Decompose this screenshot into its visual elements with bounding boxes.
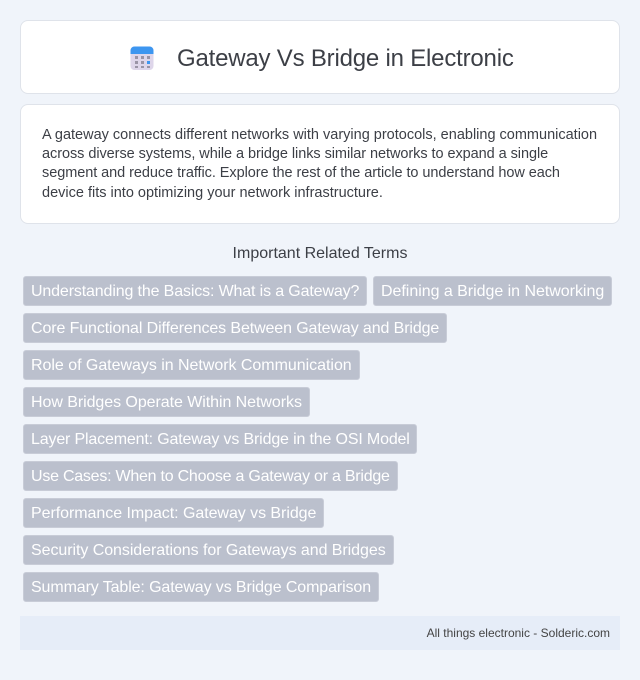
tag: Security Considerations for Gateways and Bridges: [31, 542, 386, 559]
tag: [23, 424, 417, 454]
tag: Understanding the Basics: What is a Gateway?: [31, 283, 359, 300]
tag: Summary Table: Gateway vs Bridge Comparison: [31, 579, 371, 596]
icon: calendar: [130, 46, 154, 70]
tag: [23, 387, 310, 417]
tag: [23, 350, 360, 380]
header card: [20, 20, 620, 94]
intro text panel: A gateway connects different networks with varying protocols, enabling communication: [42, 127, 597, 143]
intro text panel: segment and reduce traffic. Explore the rest of the article to understand how each: [42, 165, 560, 181]
tag: Layer Placement: Gateway vs Bridge in the OSI Model: [31, 431, 410, 448]
tag: Defining a Bridge in Networking: [381, 283, 604, 300]
tag: How Bridges Operate Within Networks: [31, 394, 302, 411]
intro text panel: [20, 104, 620, 224]
tag: [23, 313, 447, 343]
intro text panel: device fits into optimizing your network infrastructure.: [42, 185, 383, 201]
tag: [373, 276, 612, 306]
tag: [23, 276, 367, 306]
tag: [23, 498, 324, 528]
tag: Use Cases: When to Choose a Gateway or a Bridge: [31, 468, 390, 485]
footer bar: [20, 616, 620, 650]
intro text panel: across diverse systems, while a bridge links similar networks to expand a single: [42, 146, 548, 162]
tag: Role of Gateways in Network Communication: [31, 357, 352, 374]
tag: Core Functional Differences Between Gateway and Bridge: [31, 320, 439, 337]
tag: [23, 572, 379, 602]
term tags: [23, 276, 612, 602]
footer text: All things electronic - Solderic.com: [427, 626, 610, 640]
tag: Performance Impact: Gateway vs Bridge: [31, 505, 316, 522]
tag: [23, 461, 398, 491]
tag: [23, 535, 394, 565]
section heading: Important Related Terms: [233, 245, 407, 262]
title: Gateway Vs Bridge in Electronic: [177, 45, 514, 72]
